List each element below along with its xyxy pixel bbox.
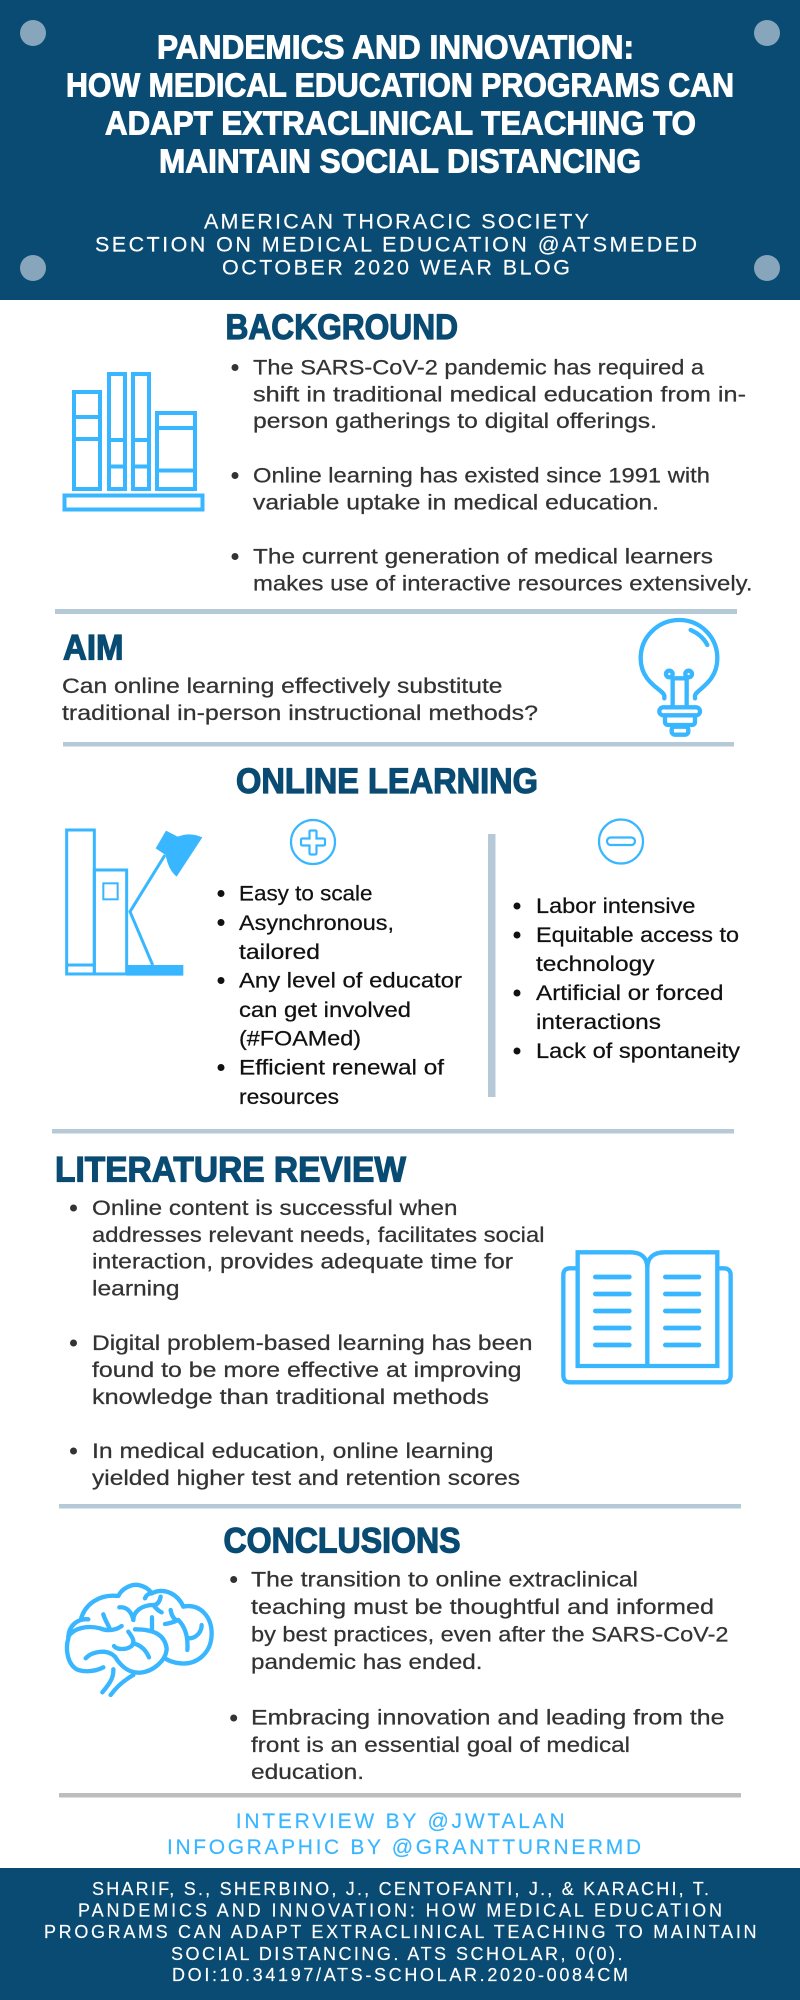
panel: citation footer: PANDEMICS AND INNOVATION: HOW MEDICAL EDUCATION	[78, 1900, 722, 1920]
text: background bullets: The current generation of medical learners	[253, 544, 713, 568]
text: literature review bullets: learning	[92, 1276, 180, 1300]
text: literature review bullets	[70, 1196, 544, 1490]
subtitle: society and date: AMERICAN THORACIC SOCIETY	[204, 210, 589, 234]
text: background bullets	[232, 356, 752, 596]
subtitle: society and date: OCTOBER 2020 WEAR BLOG	[222, 256, 570, 280]
text: conclusions bullets: Embracing innovation and leading from the	[251, 1706, 724, 1730]
list: disadvantages: Equitable access to	[536, 923, 739, 947]
list: advantages: Any level of educator	[239, 968, 462, 992]
credits: INFOGRAPHIC BY @GRANTTURNERMD	[167, 1836, 641, 1859]
heading: background: BACKGROUND	[226, 308, 458, 347]
text: conclusions bullets: front is an essential goal of medical	[251, 1733, 630, 1757]
heading: literature review: LITERATURE REVIEW	[55, 1150, 406, 1190]
list: advantages: Easy to scale	[239, 882, 372, 906]
title: HOW MEDICAL EDUCATION PROGRAMS CAN	[66, 66, 734, 104]
text: background bullets: makes use of interactive resources extensively.	[253, 572, 752, 596]
icon: open book	[563, 1252, 731, 1382]
text: literature review bullets: Online content is successful when	[92, 1196, 458, 1220]
text: literature review bullets: interaction, provides adequate time for	[92, 1250, 513, 1274]
list: disadvantages: Lack of spontaneity	[536, 1039, 740, 1063]
subtitle: society and date: SECTION ON MEDICAL EDUCATION @ATSMEDED	[95, 232, 697, 256]
list: advantages: tailored	[239, 940, 320, 964]
text: conclusions bullets: The transition to online extraclinical	[251, 1568, 638, 1592]
list: advantages: resources	[239, 1085, 339, 1109]
list: advantages	[218, 882, 462, 1109]
title: MAINTAIN SOCIAL DISTANCING	[159, 142, 641, 180]
list: disadvantages: Artificial or forced	[536, 981, 724, 1005]
text: literature review bullets: found to be more effective at improving	[92, 1358, 522, 1382]
credits: INTERVIEW BY @JWTALAN	[236, 1810, 565, 1833]
text: literature review bullets: addresses relevant needs, facilitates social	[92, 1223, 544, 1247]
title	[66, 28, 734, 180]
list: advantages: Efficient renewal of	[239, 1056, 444, 1080]
panel: citation footer: SOCIAL DISTANCING. ATS SCHOLAR, 0(0).	[171, 1944, 622, 1964]
list: advantages: Asynchronous,	[239, 911, 394, 935]
text: background bullets: The SARS-CoV-2 pandemic has required a	[253, 356, 704, 380]
text: background bullets: shift in traditional medical education from in-	[253, 382, 746, 406]
list: advantages: can get involved	[239, 998, 411, 1022]
list: disadvantages: interactions	[536, 1010, 661, 1034]
panel: citation footer	[0, 1868, 800, 2000]
panel: citation footer: DOI:10.34197/ATS-SCHOLAR.2020-0084CM	[172, 1965, 628, 1985]
text: background bullets: person gatherings to digital offerings.	[253, 409, 657, 433]
text: background bullets: variable uptake in medical education.	[253, 490, 659, 514]
icon: plus circle	[291, 820, 335, 864]
text: aim question	[62, 674, 538, 725]
icon: minus circle	[599, 820, 643, 864]
credits	[167, 1810, 641, 1859]
icon: brain	[67, 1585, 212, 1695]
text: conclusions bullets: education.	[251, 1760, 364, 1784]
heading: conclusions: CONCLUSIONS	[224, 1522, 460, 1560]
text: aim question: traditional in-person instructional methods?	[62, 701, 538, 725]
text: conclusions bullets: pandemic has ended.	[251, 1650, 482, 1674]
icon: books on shelf	[64, 374, 202, 510]
text: conclusions bullets: teaching must be thoughtful and informed	[251, 1595, 714, 1619]
panel: header	[0, 0, 800, 300]
heading: online learning: ONLINE LEARNING	[236, 762, 538, 801]
text: background bullets: Online learning has existed since 1991 with	[253, 464, 710, 488]
panel: citation footer: PROGRAMS CAN ADAPT EXTRACLINICAL TEACHING TO MAINTAIN	[44, 1922, 757, 1942]
title: ADAPT EXTRACLINICAL TEACHING TO	[105, 104, 696, 142]
text: literature review bullets: Digital problem-based learning has been	[92, 1331, 532, 1355]
list: disadvantages: Labor intensive	[536, 894, 696, 918]
icon: light bulb	[641, 620, 717, 735]
text: literature review bullets: In medical education, online learning	[92, 1439, 494, 1463]
icon: books and desk lamp	[67, 830, 202, 976]
text: literature review bullets: yielded higher test and retention scores	[92, 1466, 520, 1490]
text: conclusions bullets	[230, 1568, 728, 1784]
panel: citation footer: SHARIF, S., SHERBINO, J., CENTOFANTI, J., & KARACHI, T.	[92, 1879, 709, 1899]
subtitle: society and date	[95, 210, 697, 280]
list: disadvantages: technology	[536, 952, 655, 976]
text: aim question: Can online learning effectively substitute	[62, 674, 503, 698]
heading: aim: AIM	[63, 628, 124, 668]
list: disadvantages	[514, 894, 740, 1063]
text: conclusions bullets: by best practices, even after the SARS-CoV-2	[251, 1622, 728, 1646]
text: literature review bullets: knowledge than traditional methods	[92, 1385, 489, 1409]
list: advantages: (#FOAMed)	[239, 1026, 361, 1050]
title: PANDEMICS AND INNOVATION:	[157, 28, 634, 66]
